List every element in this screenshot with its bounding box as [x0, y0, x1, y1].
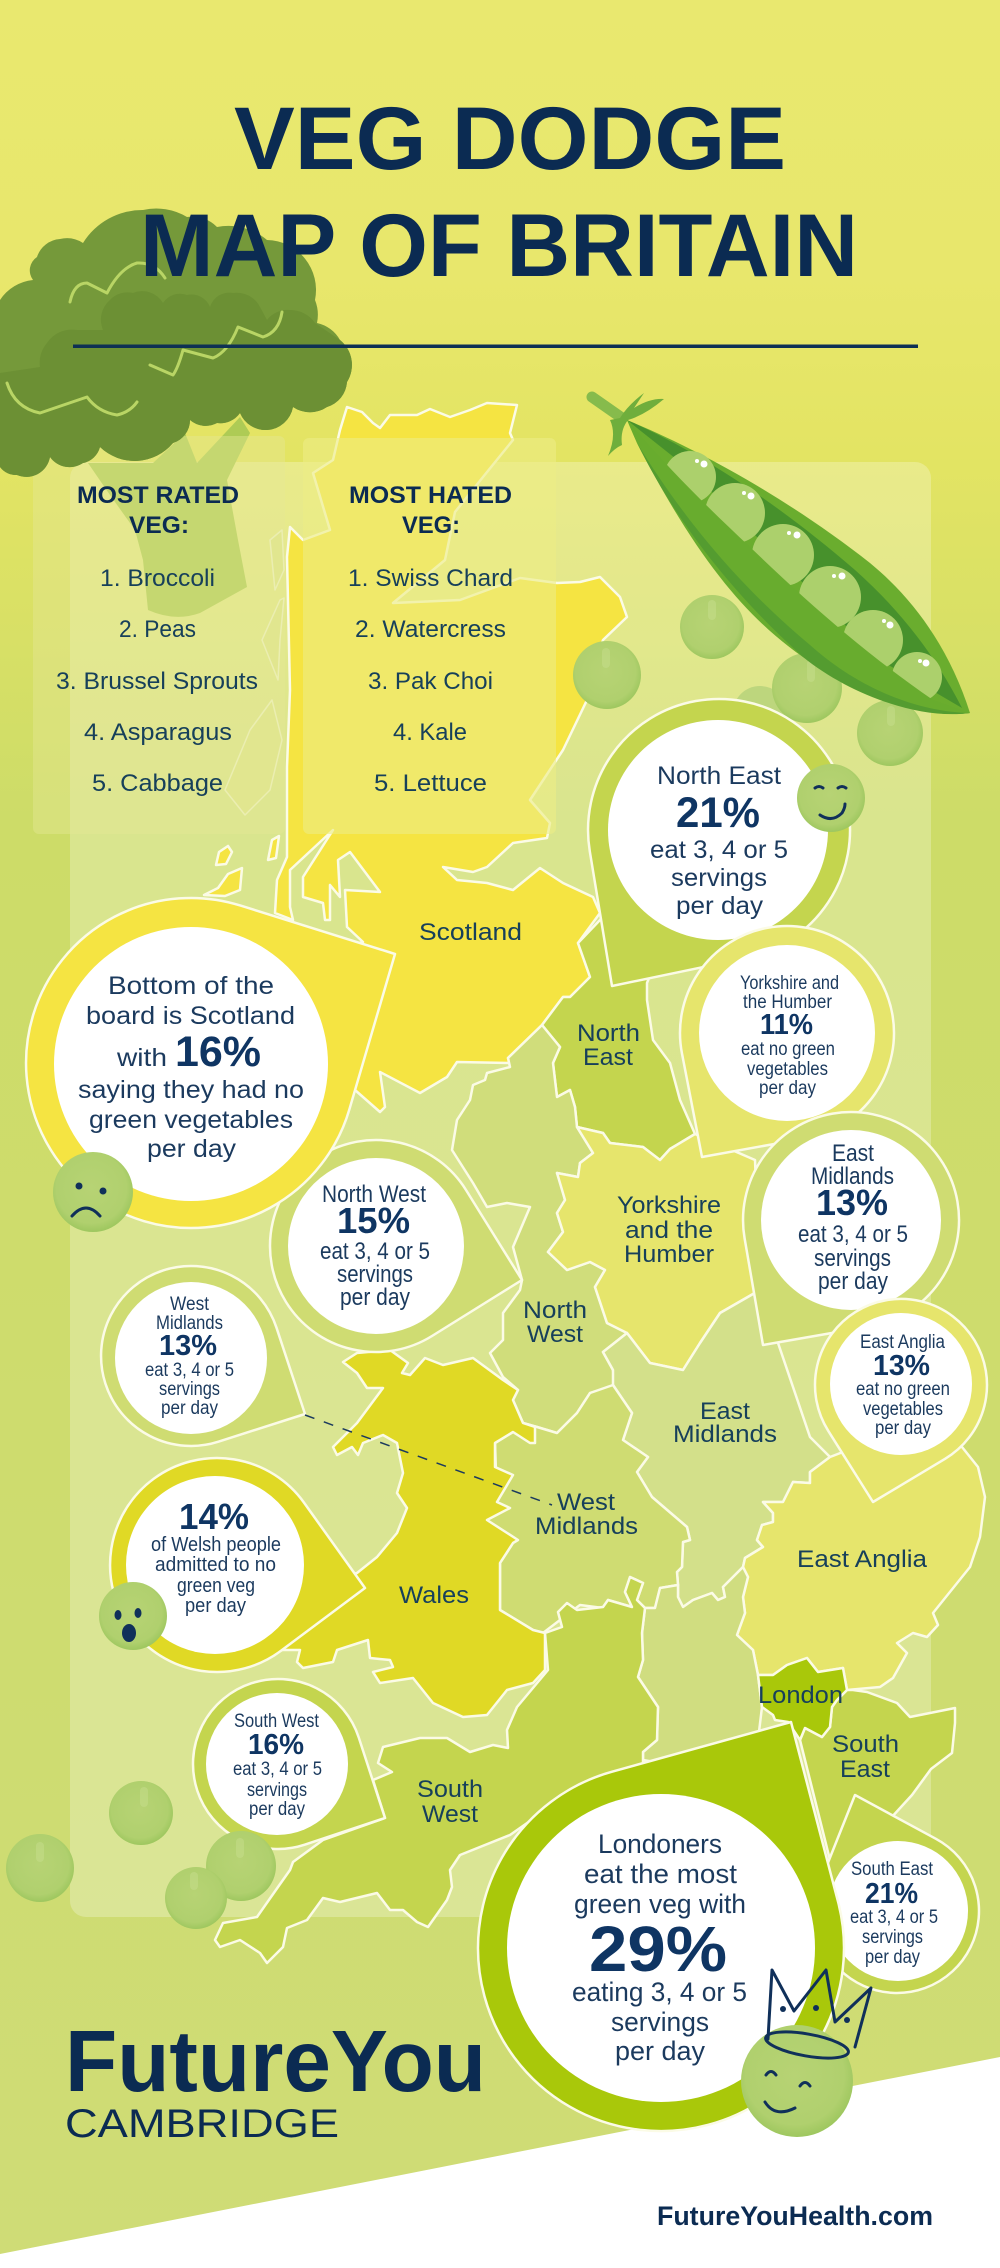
region: London [758, 1658, 847, 1740]
region labels: North [523, 1297, 587, 1324]
callout: South West: 16% [248, 1729, 304, 1761]
heading: most hated: VEG: [402, 512, 460, 539]
callout: London: green veg with [574, 1889, 746, 1919]
logo: FutureYou Cambridge: FutureYou [65, 2013, 486, 2110]
callout: West Midlands [101, 1266, 305, 1446]
callout: Wales: green veg [177, 1575, 255, 1597]
callout: North West: North West [322, 1181, 426, 1208]
region: East Anglia [737, 1430, 985, 1690]
callout: East Anglia: per day [875, 1418, 931, 1439]
icon: surprised pea Wales [99, 1582, 167, 1650]
callout: Wales: of Welsh people [151, 1534, 281, 1556]
callout: Scotland: Bottom of the [108, 972, 274, 1000]
callout: Yorkshire and the Humber: vegetables [747, 1059, 828, 1080]
website: FutureYouHealth.com [657, 2201, 933, 2231]
callout: Scotland: 16% [175, 1028, 261, 1076]
callout: Scotland: per day [147, 1135, 237, 1163]
region labels: and the [625, 1217, 713, 1244]
callout: Scotland [26, 898, 395, 1228]
callout: North West [270, 1140, 522, 1352]
callout: North West: per day [340, 1284, 410, 1311]
callout: London: Londoners [598, 1829, 722, 1859]
callout: East Midlands: Midlands [811, 1163, 894, 1190]
callout: Yorkshire and the Humber: the Humber [743, 992, 833, 1013]
region: Wales [280, 1350, 545, 1717]
region labels: West [422, 1801, 478, 1828]
region labels: South [832, 1731, 899, 1758]
list: most hated veg: 4. Kale [393, 719, 467, 746]
callout: Scotland: with [116, 1044, 167, 1072]
region labels: Midlands [673, 1421, 777, 1448]
list: most hated veg: 1. Swiss Chard [348, 565, 513, 592]
region labels: North [577, 1020, 640, 1047]
callout: East Anglia: vegetables [863, 1399, 943, 1420]
callout: South West [193, 1679, 385, 1849]
icon: pea pod [592, 393, 970, 714]
callout: South East: eat 3, 4 or 5 [850, 1907, 938, 1928]
callout: East Anglia: East Anglia [860, 1332, 945, 1353]
callout: Scotland: green vegetables [89, 1106, 293, 1134]
callout: South West: per day [249, 1799, 305, 1820]
icon: broccoli stem [88, 417, 250, 617]
callout: West Midlands: West [170, 1294, 210, 1315]
callout: London [478, 1722, 844, 2131]
callout: Wales: per day [185, 1595, 246, 1617]
title: VEG DODGE [234, 88, 786, 188]
callout: Wales: 14% [179, 1496, 249, 1537]
heading: most rated: VEG: [129, 512, 189, 539]
callout: Scotland: board is Scotland [86, 1002, 295, 1030]
list: most rated veg: 3. Brussel Sprouts [56, 668, 258, 695]
heading: most hated [349, 482, 512, 539]
region labels: Midlands [535, 1513, 638, 1540]
callout: North West: 15% [337, 1200, 410, 1241]
heading: most hated: MOST HATED [349, 482, 512, 509]
callout: North East: 21% [676, 789, 760, 837]
icon: happy pea North East [797, 764, 865, 832]
region: South East [800, 1690, 955, 1860]
region: Scotland [204, 403, 627, 1112]
region: West Midlands [487, 1385, 690, 1633]
region labels: Yorkshire [617, 1192, 721, 1219]
region: East Midlands [603, 1290, 830, 1607]
callout: North East: per day [676, 892, 764, 920]
map of Britain [204, 403, 985, 1963]
crown [764, 1970, 871, 2063]
list: most hated veg: 3. Pak Choi [368, 668, 493, 695]
callout: South West: eat 3, 4 or 5 [233, 1759, 322, 1780]
callout: West Midlands: 13% [159, 1330, 217, 1362]
icon: sad pea Scotland [53, 1152, 133, 1232]
list: most hated veg: 2. Watercress [355, 616, 506, 643]
heading: most rated: MOST RATED [77, 482, 239, 509]
callout: North East [588, 699, 850, 986]
white bottom band [0, 2057, 1000, 2268]
list: most rated veg: 4. Asparagus [84, 719, 232, 746]
list: most rated veg: 2. Peas [119, 616, 196, 643]
callout: London: servings [611, 2007, 709, 2037]
dashed pointer to West Midlands [305, 1415, 552, 1505]
callout: Scotland: saying they had no [78, 1076, 304, 1104]
panel: most rated veg [33, 436, 285, 834]
list: most rated veg: 1. Broccoli [100, 565, 215, 592]
callout: North West: servings [337, 1261, 413, 1288]
region: North West [452, 1025, 627, 1433]
logo: FutureYou Cambridge: CAMBRIDGE [65, 2102, 339, 2146]
region labels [399, 919, 928, 1828]
callout: South East: servings [862, 1927, 923, 1948]
region: South West [215, 1577, 658, 1963]
callout: West Midlands: Midlands [156, 1313, 223, 1334]
heading: most rated [77, 482, 239, 539]
region labels: East [700, 1398, 750, 1425]
callout: West Midlands: servings [159, 1379, 220, 1400]
callout: Yorkshire and the Humber [680, 926, 894, 1157]
callout: Wales [110, 1458, 365, 1672]
region: central south [638, 1567, 762, 1770]
callout: Yorkshire and the Humber: Yorkshire and [740, 973, 839, 994]
region labels: East Anglia [797, 1546, 928, 1573]
callout: South East: South East [851, 1859, 934, 1880]
callout: Yorkshire and the Humber: 11% [760, 1009, 813, 1041]
callout: West Midlands: per day [161, 1398, 218, 1419]
callout: East Midlands: East [832, 1140, 874, 1167]
callout: South East: per day [865, 1947, 920, 1968]
callout: East Anglia [815, 1299, 987, 1502]
list: most rated veg [56, 565, 258, 797]
callout: South East [815, 1795, 979, 1993]
title [140, 88, 858, 295]
region labels: South [417, 1776, 483, 1803]
callout: London: 29% [589, 1913, 727, 1985]
icon: broccoli crown [0, 209, 352, 477]
callout: East Midlands: 13% [816, 1182, 888, 1223]
list: most rated veg: 5. Cabbage [92, 770, 223, 797]
region: Yorkshire and the Humber [548, 1127, 760, 1370]
callout: West Midlands: eat 3, 4 or 5 [145, 1360, 234, 1381]
callout: North West: eat 3, 4 or 5 [320, 1238, 430, 1265]
callout: Yorkshire and the Humber: eat no green [741, 1039, 835, 1060]
list: most hated veg [348, 565, 513, 797]
callout: North East: servings [671, 864, 767, 892]
inner map panel [70, 462, 931, 1917]
callout: London: eating 3, 4 or 5 [572, 1977, 747, 2007]
loose peas top [573, 595, 923, 766]
callout: East Midlands: servings [814, 1245, 891, 1272]
callout: East Anglia: 13% [873, 1350, 930, 1382]
loose peas bottom [6, 1781, 276, 1929]
callout: South West: South West [234, 1711, 320, 1732]
list: most hated veg: 5. Lettuce [374, 770, 487, 797]
region labels: Scotland [419, 919, 522, 946]
icon: king pea [741, 1970, 871, 2137]
region labels: East [583, 1044, 633, 1071]
region labels: London [758, 1682, 843, 1709]
region labels: Wales [399, 1582, 469, 1609]
callout: East Midlands: eat 3, 4 or 5 [798, 1221, 908, 1248]
callout: East Midlands: per day [818, 1268, 888, 1295]
callout: East Anglia: eat no green [856, 1379, 950, 1400]
panel: most hated veg [303, 438, 556, 834]
callout: London: per day [615, 2036, 705, 2066]
region labels: East [840, 1756, 890, 1783]
region: North East [542, 900, 695, 1160]
callout: London: eat the most [584, 1859, 737, 1889]
region labels: Humber [624, 1241, 714, 1268]
title: MAP OF BRITAIN [140, 195, 858, 295]
callout: South West: servings [247, 1780, 307, 1801]
region labels: West [527, 1321, 583, 1348]
callout: South East: 21% [865, 1878, 918, 1910]
callout: North East: North East [657, 762, 781, 790]
callout: Wales: admitted to no [155, 1554, 276, 1576]
callout: North East: eat 3, 4 or 5 [650, 836, 788, 864]
region labels: West [557, 1489, 615, 1516]
callout: East Midlands [743, 1112, 959, 1345]
callout: Yorkshire and the Humber: per day [759, 1078, 816, 1099]
